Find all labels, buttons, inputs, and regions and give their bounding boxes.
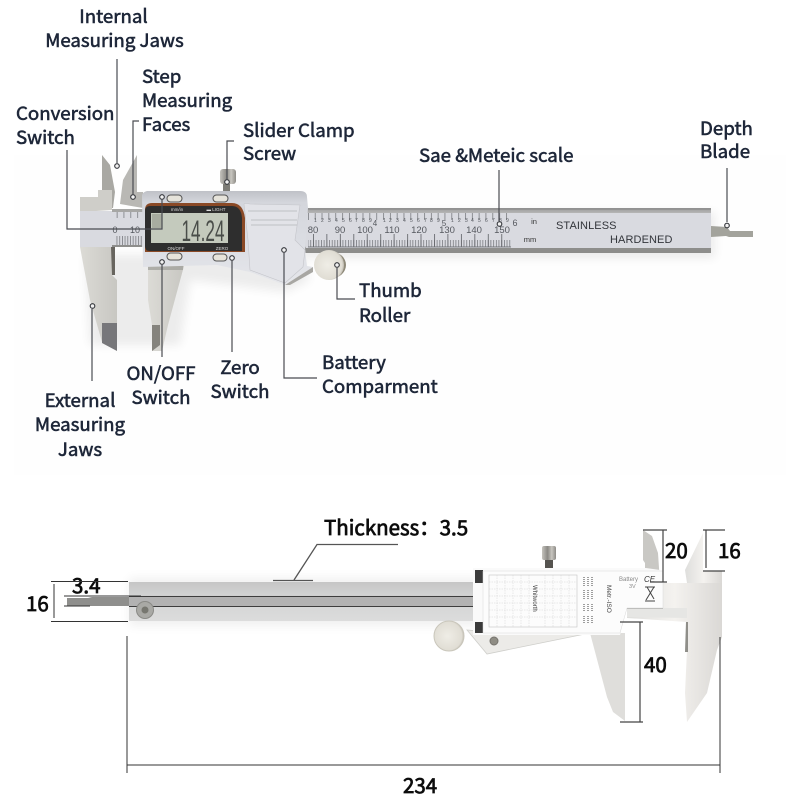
dimension: depth blade 3.4: 3.4 <box>72 569 100 599</box>
dimension: inner jaw 20 <box>643 530 688 582</box>
battery and certification marks <box>619 575 656 601</box>
label: internal measuring jaws <box>45 2 184 168</box>
battery and certification marks: Battery <box>619 577 638 583</box>
thread table printed on plate: Metr.-ISO <box>605 585 612 613</box>
upper fixed internal jaw <box>100 155 115 208</box>
dimension: total length 234 <box>127 636 720 799</box>
beam <box>129 582 479 621</box>
main beam and scales: mm <box>524 235 536 244</box>
label: zero switch: Zero <box>220 353 260 380</box>
lower sliding jaw <box>590 633 625 721</box>
label: slider clamp screw: Screw <box>243 139 296 166</box>
thread table printed on plate: Whitworth <box>531 585 537 612</box>
rear slider plate <box>473 568 663 635</box>
LCD display: ON/OFF <box>168 246 185 251</box>
label: external measuring jaws: Jaws <box>58 435 102 462</box>
label: thumb roller: Thumb <box>359 276 422 303</box>
caliper photo: front view with scale and display <box>80 155 753 351</box>
label: thumb roller <box>335 263 422 328</box>
main beam and scales: 140 <box>466 225 482 236</box>
roller bracket <box>285 267 313 285</box>
label: battery compartment: Comparment <box>322 372 438 399</box>
dimension: inner jaw 16 <box>703 530 741 571</box>
lower sliding external jaw <box>148 264 184 351</box>
thumb roller <box>314 250 346 280</box>
label: sae and metric scale <box>419 141 573 226</box>
label: on/off switch: ON/OFF <box>126 359 196 386</box>
LCD display: mm/in <box>171 207 184 212</box>
main beam and scales: 120 <box>411 225 427 236</box>
main beam and scales: 5 <box>442 219 447 228</box>
label: external measuring jaws: Measuring <box>35 410 126 437</box>
label: step measuring faces: Measuring <box>142 86 233 113</box>
dimension: inner jaw 20: 20 <box>665 534 688 564</box>
LCD display <box>145 203 245 252</box>
label: on/off switch <box>126 260 196 410</box>
main beam and scales: 130 <box>439 225 455 236</box>
main beam and scales <box>300 208 711 253</box>
main beam and scales: 110 <box>384 225 400 236</box>
depth rod <box>67 597 129 606</box>
label: conversion switch: Conversion <box>16 99 114 126</box>
dimension: total length 234: 234 <box>403 769 437 799</box>
dimension: beam width 16: 16 <box>26 587 49 617</box>
main beam and scales: HARDENED <box>610 234 673 246</box>
dimension: inner jaw 16: 16 <box>718 534 741 564</box>
main beam and scales: STAINLESS <box>556 220 617 232</box>
label: depth blade: Depth <box>700 114 753 141</box>
depth blade <box>711 226 753 237</box>
label: depth blade: Blade <box>700 137 750 164</box>
depth end screw <box>136 602 154 618</box>
label: slider clamp screw: Slider Clamp <box>243 116 355 143</box>
battery and certification marks: 3V <box>629 584 636 590</box>
slider body <box>142 191 313 285</box>
label: thumb roller: Roller <box>359 301 411 328</box>
label: depth blade <box>700 114 753 228</box>
upper sliding internal jaw <box>120 155 143 208</box>
slider clamp screw <box>220 169 236 192</box>
label: sae and metric scale: Sae &Meteic scale <box>419 141 573 168</box>
main beam and scales: in <box>531 217 537 226</box>
slider tail <box>467 630 590 654</box>
label: conversion switch <box>16 99 164 229</box>
label: slider clamp screw <box>225 116 355 184</box>
label: step measuring faces: Step <box>142 62 181 89</box>
label: step measuring faces <box>131 62 233 199</box>
main beam and scales: 150 <box>494 225 510 236</box>
battery compartment cover <box>244 204 305 283</box>
LCD display: 14.24 <box>182 215 224 248</box>
label: zero switch: Switch <box>211 377 269 404</box>
main beam and scales: 6 <box>512 218 518 228</box>
LCD display: ▬ LIGHT <box>206 207 226 212</box>
label: step measuring faces: Faces <box>142 110 191 137</box>
LCD display: ZERO <box>216 246 229 251</box>
thread table printed on plate <box>489 575 612 627</box>
fixed head with left scale <box>80 190 143 247</box>
label: battery compartment <box>282 248 438 399</box>
main beam and scales: 100 <box>357 225 373 236</box>
dimension: depth blade 3.4 <box>64 569 141 606</box>
main beam and scales: 123456789123456789123456789 <box>314 218 509 224</box>
label: conversion switch: Switch <box>16 123 75 150</box>
dimension: beam width 16 <box>26 582 128 622</box>
label: battery compartment: Battery <box>322 348 386 375</box>
upper jaws <box>643 530 722 590</box>
dimension: thickness 3.5 <box>273 511 468 580</box>
dimension: outer jaw 40 <box>620 622 667 722</box>
clamp screw <box>542 546 556 570</box>
thumb roller <box>434 621 464 651</box>
main beam and scales: 80 <box>308 225 318 236</box>
main beam and scales: 4 <box>373 219 378 228</box>
lower fixed external jaw <box>80 247 117 351</box>
fixed head with left scale: 0 <box>112 225 118 235</box>
buttons <box>167 195 228 261</box>
label: zero switch <box>211 256 269 404</box>
fixed head with left scale: 10 <box>130 225 140 235</box>
dimension: thickness 3.5: Thickness：3.5 <box>324 511 468 541</box>
dimension: outer jaw 40: 40 <box>644 648 667 678</box>
tail screw <box>490 637 498 645</box>
caliper photo: back view <box>67 530 722 722</box>
label: external measuring jaws <box>35 304 126 462</box>
label: external measuring jaws: External <box>45 386 115 413</box>
battery and certification marks: CE <box>644 575 656 584</box>
label: internal measuring jaws: Internal <box>79 2 148 29</box>
label: on/off switch: Switch <box>132 383 190 410</box>
main beam and scales: 90 <box>335 225 345 236</box>
fixed head and lower jaw <box>627 583 722 722</box>
label: internal measuring jaws: Measuring Jaws <box>45 26 184 53</box>
